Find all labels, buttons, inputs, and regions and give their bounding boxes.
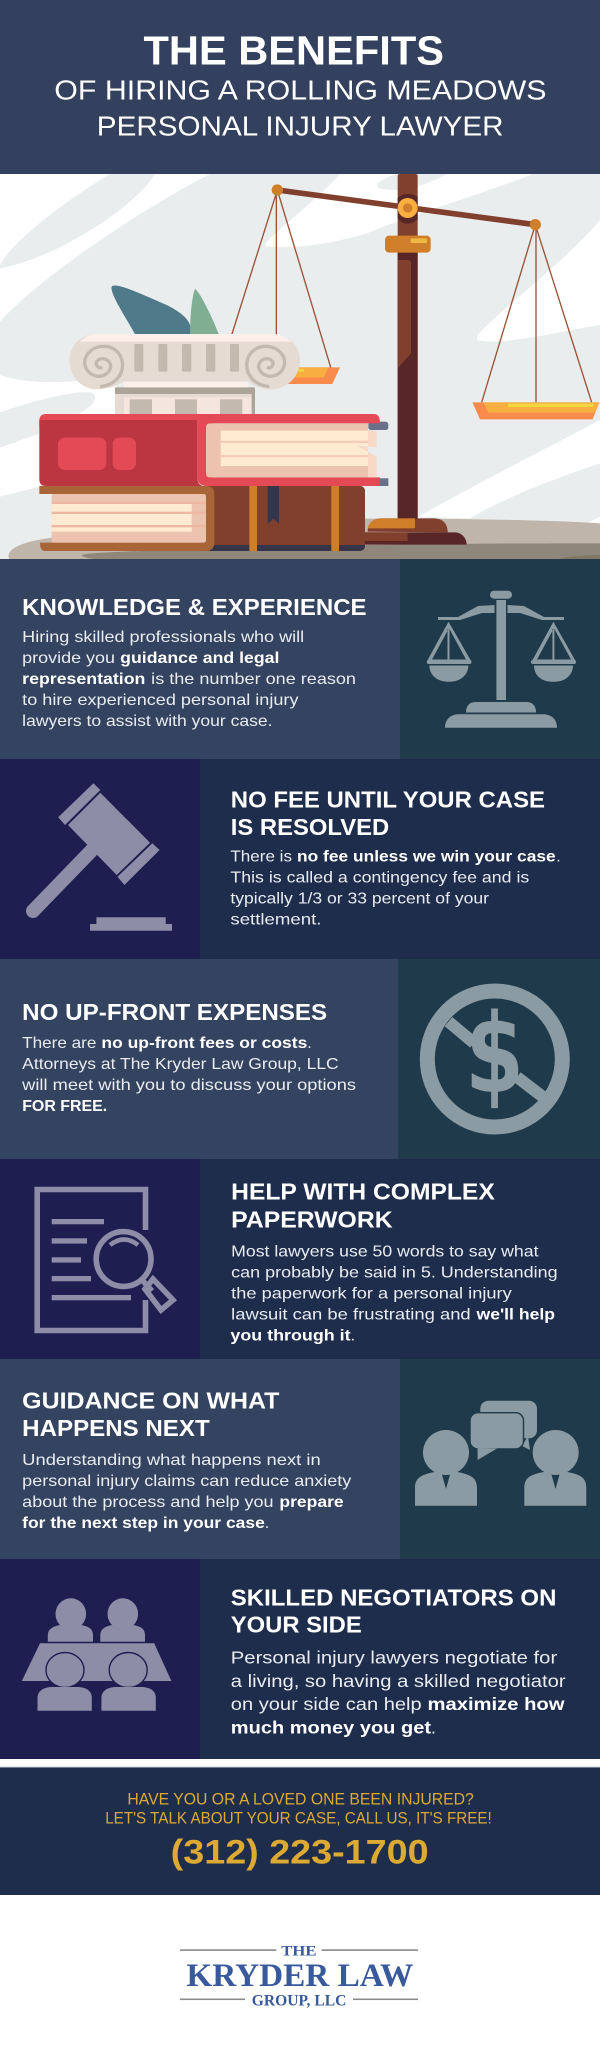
body text: we'll help xyxy=(475,1307,555,1324)
body text: guidance and legal xyxy=(120,650,279,667)
body text xyxy=(230,849,561,929)
title: THE BENEFITS xyxy=(144,28,444,74)
callout text xyxy=(105,1789,492,1827)
subtitle xyxy=(54,74,547,142)
body text: provide you xyxy=(22,650,115,667)
heading: YOUR SIDE xyxy=(231,1612,362,1638)
body text: Personal injury lawyers negotiate for xyxy=(231,1648,557,1668)
icon: meeting at a table xyxy=(22,1598,171,1711)
leaves xyxy=(112,285,219,334)
body text: There are xyxy=(22,1035,97,1052)
panel: no fee until resolved xyxy=(0,759,600,959)
body text: a living, so having a skilled negotiator xyxy=(231,1671,566,1691)
body text xyxy=(21,1035,356,1115)
body text: for the next step in your case xyxy=(22,1515,265,1532)
body text: typically 1/3 or 33 percent of your xyxy=(230,891,490,908)
body text xyxy=(231,1648,566,1737)
body text: on your side can help xyxy=(231,1694,422,1714)
heading: IS RESOLVED xyxy=(231,814,389,840)
ground shadow xyxy=(9,519,600,559)
logo: The Kryder Law Group xyxy=(180,1944,418,2010)
body text: FOR FREE. xyxy=(22,1098,107,1115)
red book xyxy=(39,414,388,486)
heading: NO UP-FRONT EXPENSES xyxy=(22,999,327,1025)
panel: no up-front expenses xyxy=(0,959,600,1159)
body text xyxy=(230,1244,558,1345)
heading xyxy=(231,1178,495,1233)
panel: skilled negotiators xyxy=(0,1559,600,1759)
body text: . xyxy=(351,1328,355,1345)
scale right pan xyxy=(472,402,599,419)
scale beam xyxy=(272,184,541,253)
body text: . xyxy=(431,1717,436,1737)
heading xyxy=(231,786,545,840)
body text: prepare xyxy=(279,1494,344,1511)
body text xyxy=(22,629,356,730)
brown book xyxy=(39,486,365,551)
body text: . xyxy=(265,1515,269,1532)
body text: Hiring skilled professionals who will xyxy=(22,629,304,646)
subtitle: OF HIRING A ROLLING MEADOWS xyxy=(54,74,547,105)
heading: PAPERWORK xyxy=(231,1207,393,1233)
logo: The Kryder Law Group: THE xyxy=(281,1944,316,1960)
heading xyxy=(231,1585,556,1638)
body text: lawsuit can be frustrating and xyxy=(231,1307,471,1324)
scale strings and left pan xyxy=(232,190,592,402)
body text: about the process and help you xyxy=(22,1494,274,1511)
body text: Attorneys at The Kryder Law Group, LLC xyxy=(22,1056,339,1073)
heading: NO FEE UNTIL YOUR CASE xyxy=(231,786,545,812)
body text: This is called a contingency fee and is xyxy=(230,870,529,887)
body text: will meet with you to discuss your options xyxy=(21,1077,356,1094)
header banner xyxy=(0,0,600,174)
heading: HAPPENS NEXT xyxy=(22,1415,210,1441)
panel: help with complex paperwork xyxy=(0,1159,600,1359)
phone number: (312) 223-1700 xyxy=(171,1833,429,1871)
body text: settlement. xyxy=(230,912,322,929)
body text: Most lawyers use 50 words to say what xyxy=(231,1244,539,1261)
heading: HELP WITH COMPLEX xyxy=(231,1178,495,1204)
body text: . xyxy=(307,1035,312,1052)
icon: no dollar sign xyxy=(427,990,562,1127)
call to action banner xyxy=(0,1766,600,1895)
heading: KNOWLEDGE & EXPERIENCE xyxy=(22,594,367,620)
body text: can probably be said in 5. Understanding xyxy=(231,1265,558,1282)
panel: guidance on what happens next xyxy=(0,1359,600,1559)
scale pole xyxy=(398,174,418,521)
body text: There is xyxy=(230,849,292,866)
panel: knowledge and experience xyxy=(0,559,600,759)
heading: GUIDANCE ON WHAT xyxy=(22,1388,279,1414)
body text: to hire experienced personal injury xyxy=(22,692,298,709)
body text: no fee unless we win your case xyxy=(297,849,556,866)
icon: gavel xyxy=(33,783,172,931)
body text: lawyers to assist with your case. xyxy=(22,713,273,730)
column xyxy=(69,334,300,415)
body text xyxy=(22,1452,351,1532)
body text: you through it xyxy=(230,1328,351,1345)
logo: The Kryder Law Group: GROUP, LLC xyxy=(252,1993,346,2010)
body text: . xyxy=(556,849,561,866)
body text: the paperwork for a personal injury xyxy=(231,1286,512,1303)
subtitle: PERSONAL INJURY LAWYER xyxy=(97,111,504,142)
body text: Understanding what happens next in xyxy=(22,1452,321,1469)
icon: document with magnifier xyxy=(37,1190,173,1330)
heading: SKILLED NEGOTIATORS ON xyxy=(231,1585,556,1611)
heading xyxy=(22,1388,279,1441)
callout text: LET'S TALK ABOUT YOUR CASE, CALL US, IT'S FREE! xyxy=(105,1808,492,1827)
icon: two people talking xyxy=(415,1401,586,1506)
logo: The Kryder Law Group: KRYDER LAW xyxy=(186,1958,413,1994)
callout text: HAVE YOU OR A LOVED ONE BEEN INJURED? xyxy=(127,1789,474,1808)
body text: is the number one reason xyxy=(151,671,356,688)
body text: personal injury claims can reduce anxiety xyxy=(22,1473,351,1490)
body text: representation xyxy=(22,671,145,688)
icon: balance scale xyxy=(427,591,576,728)
scale base xyxy=(365,518,467,545)
body text: maximize how xyxy=(428,1694,565,1714)
body text: much money you get xyxy=(231,1717,431,1737)
icon: no dollar sign: $ xyxy=(465,990,524,1118)
body text: no up-front fees or costs xyxy=(101,1035,307,1052)
hero illustration: scales of justice, column and books xyxy=(0,174,600,559)
